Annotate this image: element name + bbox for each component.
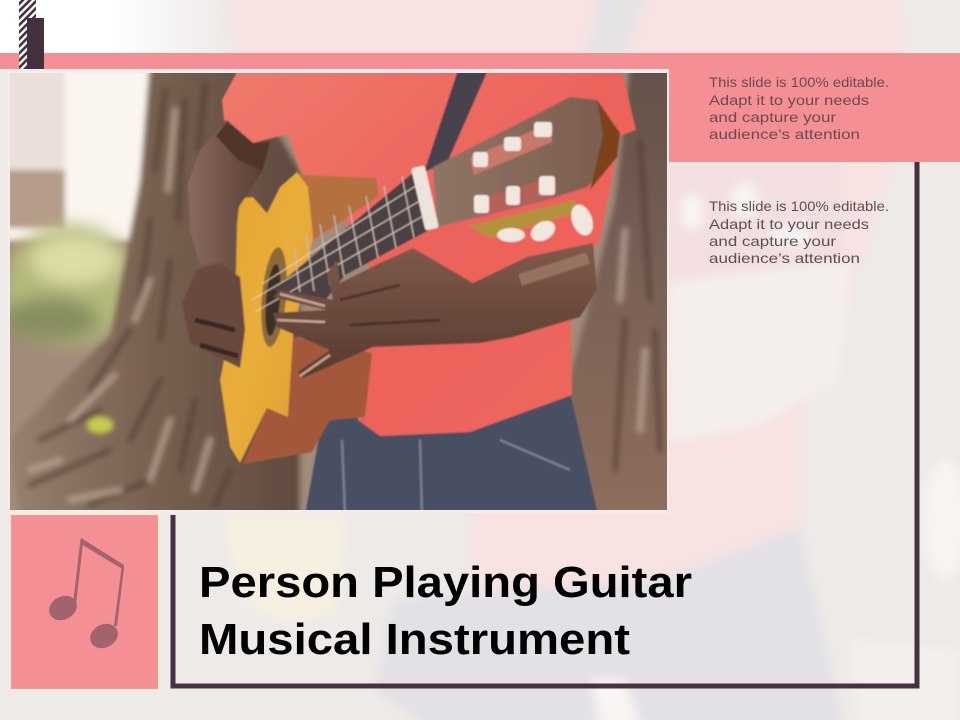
his right arm [188,120,270,265]
title: Musical Instrument [199,615,630,664]
text block: below panel: audience’s attention [709,251,860,266]
neck [272,167,433,303]
guitar top [220,172,313,463]
text block: below panel: This slide is 100% editable. [709,199,889,214]
title: Person Playing Guitar [199,558,692,607]
headstock [433,97,620,227]
shirt [222,70,636,436]
his left forearm and hand [273,243,597,378]
frame lines around title [173,162,917,686]
text block: pink panel: and capture your [709,110,837,125]
text block: pink panel: audience’s attention [709,127,860,142]
corner accent: hatched and dark bars [19,0,44,69]
photo: person playing guitar [0,60,690,530]
text block: pink panel: This slide is 100% editable. [709,75,889,90]
icon tile: music note [12,516,158,688]
top pink band [0,53,960,69]
icon: music note [45,538,124,653]
pink text panel [669,53,960,162]
text block: pink panel: Adapt it to your needs [709,93,869,108]
strap [424,70,488,172]
jeans [305,392,598,515]
guitar sides [300,175,379,240]
text block: below panel: Adapt it to your needs [709,217,869,232]
text block: below panel: and capture your [709,234,837,249]
